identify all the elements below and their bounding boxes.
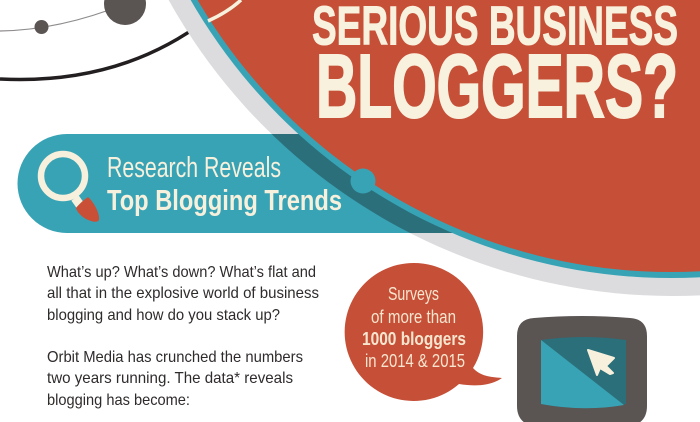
callout: surveys speech bubble: of more than xyxy=(371,307,456,327)
banner: research reveals xyxy=(17,134,460,233)
title xyxy=(312,0,678,137)
black orbit curve xyxy=(0,20,206,80)
intro paragraph: two years running. The data* reveals xyxy=(47,370,293,387)
intro paragraph: What’s up? What’s down? What’s flat and xyxy=(47,264,316,281)
big red circle with teal ring xyxy=(117,0,700,278)
callout: surveys speech bubble xyxy=(345,263,502,401)
callout: surveys speech bubble: Surveys xyxy=(388,284,439,304)
cream curve in circle xyxy=(208,0,241,21)
intro paragraph xyxy=(47,264,319,409)
grey circle shadow xyxy=(96,0,700,296)
intro paragraph: Orbit Media has crunched the numbers xyxy=(47,349,303,366)
icon: magnifying glass xyxy=(41,154,99,222)
callout: surveys speech bubble: in 2014 & 2015 xyxy=(365,351,465,371)
callout: surveys speech bubble: 1000 bloggers xyxy=(362,329,466,349)
intro paragraph: blogging and how do you stack up? xyxy=(47,307,280,324)
intro paragraph: blogging has become: xyxy=(47,392,190,409)
teal dot on ring xyxy=(350,168,376,194)
decorative orbit with planets xyxy=(0,0,146,34)
intro paragraph: all that in the explosive world of business xyxy=(47,285,319,302)
icon: cursor arrow xyxy=(588,350,614,375)
icon: monitor with cursor xyxy=(517,316,647,422)
banner heading xyxy=(107,152,342,217)
banner heading: Top Blogging Trends xyxy=(107,185,342,217)
banner heading: Research Reveals xyxy=(107,152,281,184)
